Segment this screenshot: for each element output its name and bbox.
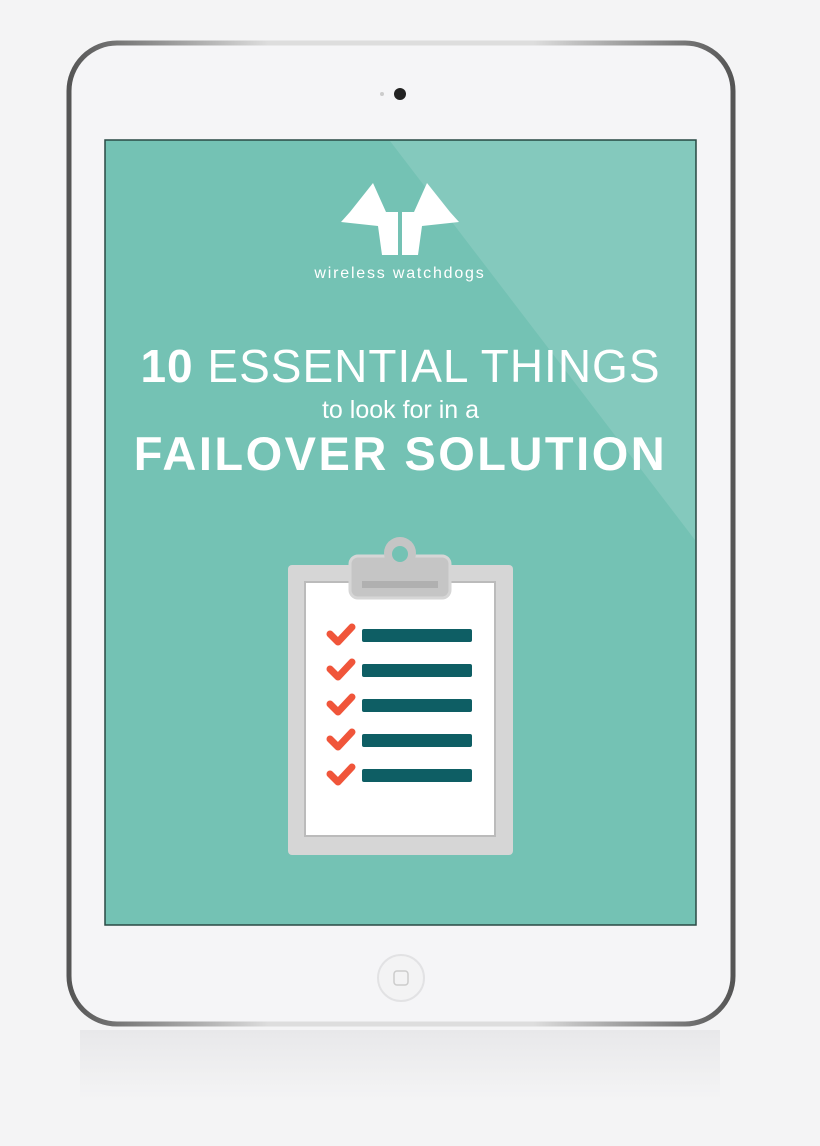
home button [378, 955, 424, 1001]
title: to look for in a [322, 396, 479, 424]
title [134, 340, 667, 480]
screen [105, 140, 696, 925]
camera [394, 88, 406, 100]
brand name: wireless watchdogs [314, 265, 486, 282]
title: 10 ESSENTIAL THINGS [140, 340, 661, 392]
title: FAILOVER SOLUTION [134, 427, 667, 480]
tablet body [69, 43, 733, 1024]
reflection [80, 1030, 720, 1100]
clipboard [288, 537, 513, 855]
logo: dog heads [341, 183, 459, 255]
